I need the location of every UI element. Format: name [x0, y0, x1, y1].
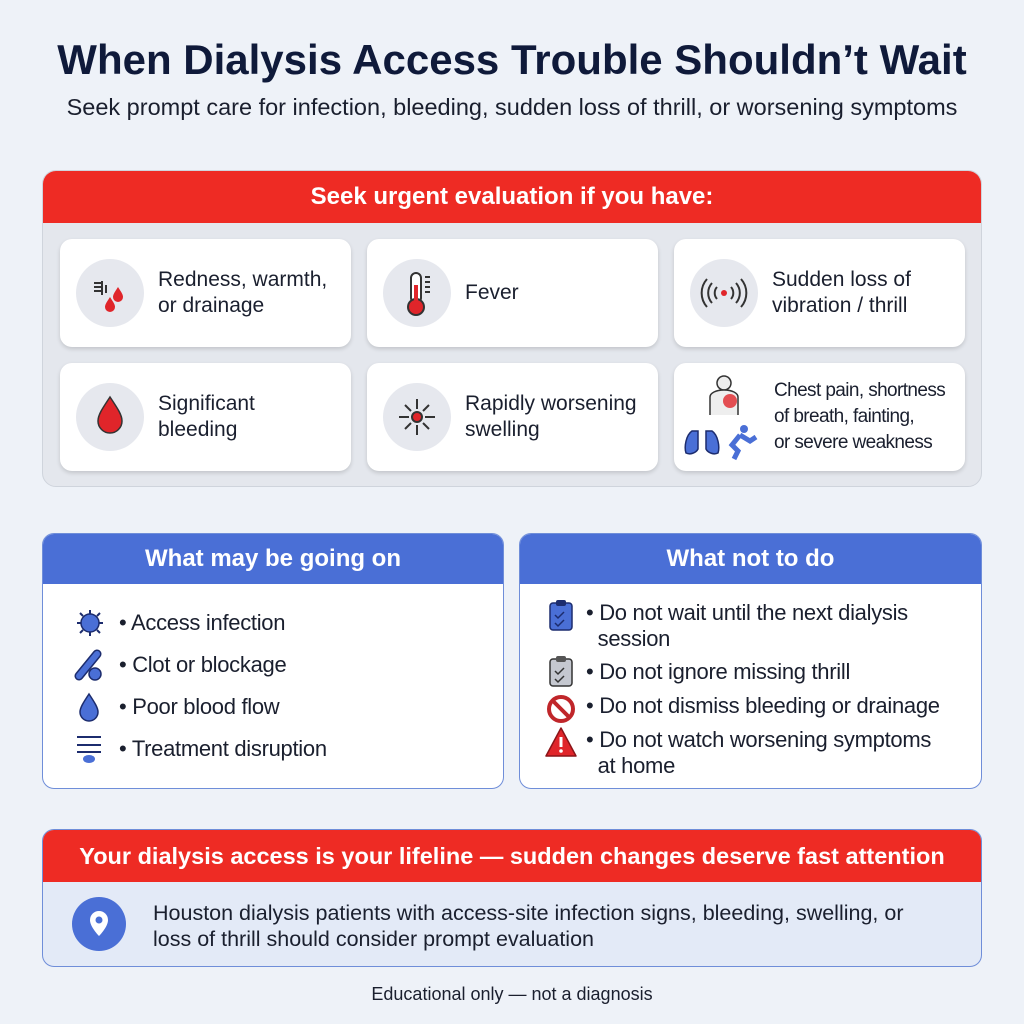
icon: clot	[74, 650, 102, 681]
heading: what not to do	[520, 534, 981, 584]
icon: prohibited	[547, 695, 575, 723]
heading: lifeline	[43, 830, 981, 882]
card: chest pain: of breath, fainting,	[774, 406, 914, 427]
heading: what not to do: What not to do	[667, 545, 834, 572]
heading: urgent: Seek urgent evaluation if you have:	[311, 183, 713, 210]
card: bleeding: Significant	[158, 392, 255, 415]
card: redness: or drainage	[158, 294, 264, 317]
icon: disruption	[77, 736, 101, 763]
panel: what not to do: • Do not ignore missing thrill	[586, 659, 850, 684]
panel: urgent evaluation	[42, 170, 982, 487]
icon: drop	[79, 692, 99, 722]
icon: clipboard blue	[549, 600, 573, 631]
icon: thermometer	[383, 259, 451, 327]
heading: urgent	[43, 171, 981, 223]
panel: what not to do: • Do not dismiss bleeding or drainage	[586, 693, 940, 718]
card: bleeding	[60, 363, 351, 471]
icon: clipboard gray	[549, 656, 573, 687]
title: When Dialysis Access Trouble Shouldn’t Wait	[57, 36, 967, 83]
card: swelling: swelling	[465, 418, 540, 441]
panel: what may be going on	[42, 533, 504, 789]
subtitle: Seek prompt care for infection, bleeding, sudden loss of thrill, or worsening symptoms	[67, 94, 957, 120]
card: swelling	[367, 363, 658, 471]
panel: what not to do: • Do not watch worsening symptoms	[586, 727, 931, 752]
card: chest pain: Chest pain, shortness	[774, 380, 945, 401]
card: thrill: vibration / thrill	[772, 294, 907, 317]
heading: lifeline: Your dialysis access is your lifeline — sudden changes deserve fast attention	[79, 843, 945, 869]
card: chest pain	[674, 363, 965, 471]
card: redness	[60, 239, 351, 347]
heading: what may be going on: What may be going on	[145, 545, 401, 572]
icon: blood drop	[76, 383, 144, 451]
icon: drainage	[76, 259, 144, 327]
panel: what not to do	[519, 533, 982, 789]
card: redness: Redness, warmth,	[158, 268, 327, 291]
card: bleeding: bleeding	[158, 418, 237, 441]
footer: Educational only — not a diagnosis	[371, 984, 653, 1004]
icon: chest/lungs	[684, 375, 758, 460]
card: fever	[367, 239, 658, 347]
icon: location pin	[72, 897, 126, 951]
heading: what may be going on	[43, 534, 503, 584]
panel: lifeline callout	[42, 829, 982, 967]
icon: swelling arrows	[383, 383, 451, 451]
card: swelling: Rapidly worsening	[465, 392, 637, 415]
panel: what may be going on: • Clot or blockage	[119, 652, 286, 677]
text: houston: loss of thrill should consider prompt evaluation	[153, 927, 594, 951]
panel: what may be going on: • Access infection	[119, 610, 285, 635]
panel: what not to do: at home	[598, 753, 675, 778]
text: houston: Houston dialysis patients with access-site infection signs, bleeding, swelling, or	[153, 901, 903, 925]
card: chest pain: or severe weakness	[774, 432, 932, 453]
text: houston	[153, 901, 904, 951]
panel: what not to do: • Do not wait until the next dialysis	[586, 600, 908, 625]
icon: warning	[545, 727, 577, 757]
icon: vibration	[690, 259, 758, 327]
card: thrill: Sudden loss of	[772, 268, 911, 291]
card: thrill	[674, 239, 965, 347]
icon: virus	[77, 610, 103, 636]
panel: what not to do: session	[598, 626, 670, 651]
panel: what may be going on: • Treatment disruption	[119, 736, 327, 761]
card: fever: Fever	[465, 281, 519, 304]
panel: what may be going on: • Poor blood flow	[119, 694, 279, 719]
